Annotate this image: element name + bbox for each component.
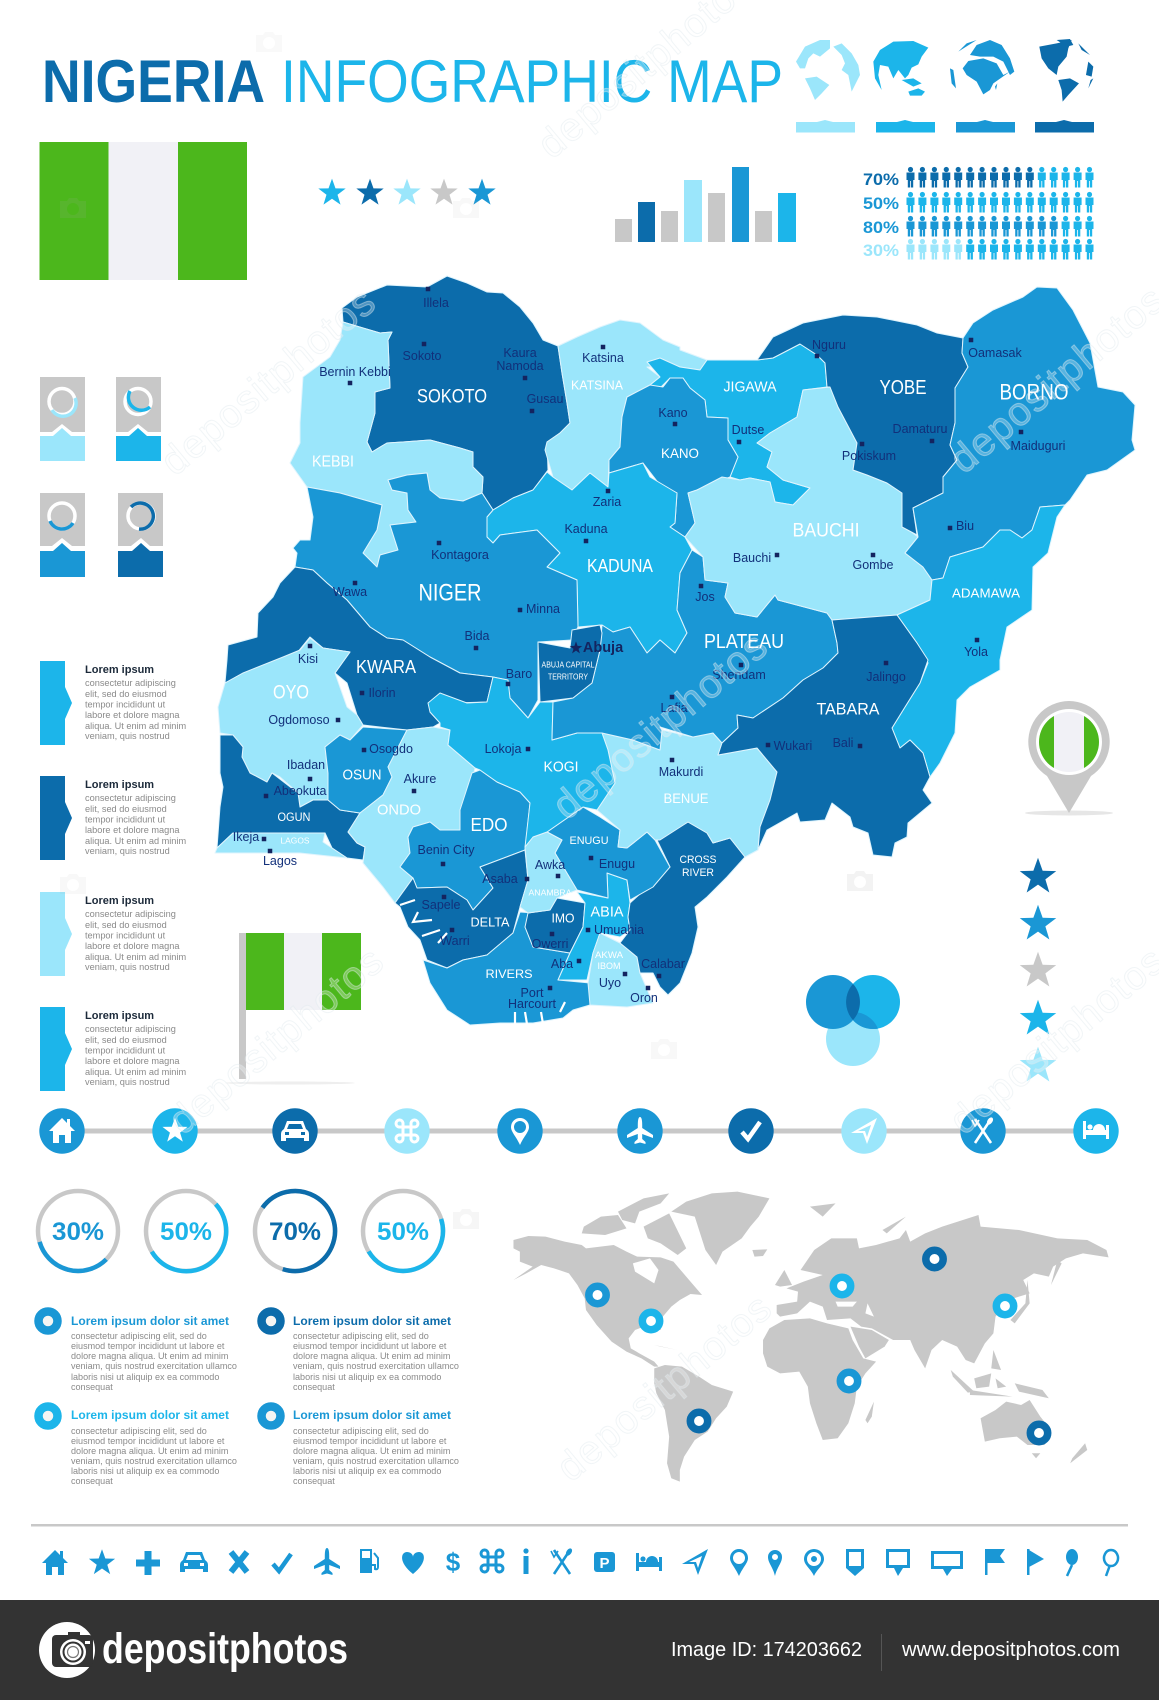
city labels: Lagos xyxy=(263,854,297,868)
city labels: Kisi xyxy=(298,652,318,666)
state names: KOGI xyxy=(544,758,578,776)
city labels: Lokoja xyxy=(485,742,521,756)
state: Taraba xyxy=(718,615,932,857)
state names: ABUJA CAPITAL xyxy=(542,660,595,670)
bar chart xyxy=(615,167,796,242)
state names: KEBBI xyxy=(312,454,354,470)
globe: light xyxy=(796,40,860,100)
info item 1: veniam, quis nostrud xyxy=(85,731,170,741)
info item 3: veniam, quis nostrud xyxy=(85,962,170,972)
city labels: Jalingo xyxy=(866,670,906,684)
state names: NIGER xyxy=(418,580,482,606)
pole shadow xyxy=(225,1082,355,1084)
donut 50% xyxy=(146,1191,226,1271)
city labels: Uyo xyxy=(599,976,621,990)
text block 1 xyxy=(38,1312,237,1392)
city labels: Ogdomoso xyxy=(268,713,330,727)
watermarks: depositphotos xyxy=(152,280,384,484)
info item 4: tempor incididunt ut xyxy=(85,1046,166,1056)
city labels: Port xyxy=(521,986,544,1000)
capital: Abuja: Abuja xyxy=(583,640,624,656)
info item 4: labore et dolore magna xyxy=(85,1056,180,1066)
state: Kano xyxy=(609,378,738,537)
info item 3: labore et dolore magna xyxy=(85,941,180,951)
globe legend bars xyxy=(796,120,1094,132)
info item 4: aliqua. Ut enim ad minim xyxy=(85,1067,186,1077)
city labels: Gusau xyxy=(527,392,563,406)
city labels: Katsina xyxy=(582,351,624,365)
info item 2 xyxy=(40,776,186,860)
donut 50% second: 50% xyxy=(377,1218,429,1246)
state: Bauchi xyxy=(685,387,932,620)
state: Kaduna xyxy=(487,463,692,653)
info item 2: aliqua. Ut enim ad minim xyxy=(85,836,186,846)
map pin with flag xyxy=(1025,701,1113,816)
ring widgets xyxy=(40,377,163,577)
state: Abuja Capital Territory xyxy=(538,625,602,702)
bottom icon strip: $ xyxy=(446,1547,461,1577)
footer logo: depositphotos xyxy=(102,1625,348,1673)
state names: TABARA xyxy=(816,700,880,718)
info item 4: Lorem ipsum xyxy=(85,1010,154,1022)
city labels: Zaria xyxy=(593,495,621,509)
state: Cross River xyxy=(620,822,745,995)
city labels: Aba xyxy=(551,957,573,971)
icon: pin xyxy=(497,1108,543,1154)
state: Osun xyxy=(325,727,407,813)
text block 4: eiusmod tempor incididunt ut labore et xyxy=(293,1436,447,1446)
info item 4 xyxy=(40,1007,186,1091)
city labels: Namoda xyxy=(496,359,544,373)
city labels: Oamasak xyxy=(968,346,1022,360)
location markers xyxy=(589,1250,1048,1442)
title xyxy=(42,48,783,115)
text block 2: consectetur adipiscing elit, sed do xyxy=(293,1331,429,1341)
text block 1: eiusmod tempor incididunt ut labore et xyxy=(71,1341,225,1351)
info item 2: labore et dolore magna xyxy=(85,825,180,835)
state names: AKWA xyxy=(595,950,623,960)
widget 2 xyxy=(116,377,161,461)
info item 3: aliqua. Ut enim ad minim xyxy=(85,952,186,962)
people percentage chart: 30% xyxy=(863,241,899,260)
text block 4: veniam, quis nostrud exercitation ullamco xyxy=(293,1456,459,1466)
world map xyxy=(513,1192,1109,1482)
state names: TERRITORY xyxy=(548,672,589,682)
city labels: Minna xyxy=(526,602,560,616)
state: Plateau xyxy=(552,550,838,750)
state names: IMO xyxy=(552,910,574,926)
footer logo xyxy=(39,1622,348,1678)
watermarks: depositphotos xyxy=(160,939,392,1143)
info item 3: consectetur adipiscing xyxy=(85,909,176,919)
state: Lagos xyxy=(215,833,347,858)
city labels: Wukari xyxy=(774,739,812,753)
bottom icon strip: P xyxy=(599,1555,610,1572)
state: Kebbi xyxy=(290,322,483,567)
title: NIGERIA xyxy=(42,48,265,115)
state names: OSUN xyxy=(342,766,382,784)
state names: LAGOS xyxy=(280,836,310,846)
city labels: Warri xyxy=(440,934,470,948)
city labels: Damaturu xyxy=(893,422,947,436)
city labels: Gombe xyxy=(852,558,894,572)
city labels: Harcourt xyxy=(508,997,556,1011)
donut charts xyxy=(38,1191,443,1271)
donut 70%: 70% xyxy=(269,1218,321,1246)
state: Katsina xyxy=(545,320,707,490)
state names: RIVER xyxy=(682,867,714,879)
text block 3: consectetur adipiscing elit, sed do xyxy=(71,1426,207,1436)
state: Rivers xyxy=(423,912,590,1025)
pole xyxy=(239,933,246,1079)
state names: OGUN xyxy=(278,810,310,824)
state names: ANAMBRA xyxy=(528,888,572,898)
text block 2: eiusmod tempor incididunt ut labore et xyxy=(293,1341,447,1351)
text block 4 xyxy=(262,1406,459,1486)
bottom icon strip xyxy=(42,1547,1118,1577)
city labels: Bali xyxy=(833,736,853,750)
info item 1: labore et dolore magna xyxy=(85,710,180,720)
text block 3: consequat xyxy=(71,1476,113,1486)
state: Yobe xyxy=(757,315,968,535)
globe: medium xyxy=(950,40,1014,94)
info item 2: consectetur adipiscing xyxy=(85,793,176,803)
widget 1 xyxy=(40,377,85,461)
donut 70% xyxy=(255,1191,335,1271)
city labels: Abeokuta xyxy=(274,784,326,798)
state names: BAUCHI xyxy=(792,520,860,542)
info item 2: elit, sed do eiusmod xyxy=(85,804,167,814)
state names: EDO xyxy=(470,815,508,835)
footer bar xyxy=(0,1600,1159,1700)
people percentage chart: 70% xyxy=(863,170,899,189)
state names: CROSS xyxy=(680,854,716,866)
text block 1: Lorem ipsum dolor sit amet xyxy=(71,1314,229,1328)
stars column xyxy=(1020,858,1056,1082)
city labels: Nguru xyxy=(812,338,846,352)
delta creeks xyxy=(400,900,590,1024)
Nigeria flag xyxy=(40,142,247,280)
text block 4: dolore magna aliqua. Ut enim ad minim xyxy=(293,1446,450,1456)
city labels: Sapele xyxy=(422,898,461,912)
info item 4: veniam, quis nostrud xyxy=(85,1077,170,1087)
state: Anambra xyxy=(520,832,577,913)
info item 1: aliqua. Ut enim ad minim xyxy=(85,721,186,731)
website: www.depositphotos.com xyxy=(901,1639,1120,1661)
city markers xyxy=(264,289,1021,988)
info item 1 xyxy=(40,661,186,745)
city labels: Ibadan xyxy=(287,758,325,772)
icon: star xyxy=(152,1108,198,1154)
text block 4: Lorem ipsum dolor sit amet xyxy=(293,1408,451,1422)
text block 2: dolore magna aliqua. Ut enim ad minim xyxy=(293,1351,450,1361)
state: Imo xyxy=(525,898,585,953)
text block 3: veniam, quis nostrud exercitation ullamco xyxy=(71,1456,237,1466)
icon: car xyxy=(272,1108,318,1154)
info item 3: tempor incididunt ut xyxy=(85,930,166,940)
state: Adamawa xyxy=(892,505,1065,777)
state: Ondo xyxy=(348,727,475,903)
venn diagram xyxy=(806,975,900,1066)
state: Jigawa xyxy=(647,344,827,505)
donut 50%: 50% xyxy=(160,1218,212,1246)
city labels: Lafia xyxy=(660,701,688,715)
state: Kwara xyxy=(225,567,493,730)
text block 3: laboris nisi ut aliquip ex ea commodo xyxy=(71,1466,219,1476)
state names: DELTA xyxy=(470,914,510,930)
icon: navigation xyxy=(841,1108,887,1154)
city labels: Benin City xyxy=(418,843,475,857)
info item 2: Lorem ipsum xyxy=(85,779,154,791)
info item 1: tempor incididunt ut xyxy=(85,700,166,710)
city labels: Baro xyxy=(506,667,532,681)
state names: OYO xyxy=(273,682,309,704)
text block 3 xyxy=(38,1406,237,1486)
state names: ONDO xyxy=(377,802,421,818)
text block 1: dolore magna aliqua. Ut enim ad minim xyxy=(71,1351,228,1361)
icon: command xyxy=(384,1108,430,1154)
state names: ADAMAWA xyxy=(952,586,1020,600)
info item 3: Lorem ipsum xyxy=(85,895,154,907)
watermarks: depositphotos xyxy=(544,624,776,828)
state: Edo xyxy=(400,770,530,910)
city labels: Osogdo xyxy=(369,742,413,756)
city labels: Oron xyxy=(630,991,658,1005)
state names: ABIA xyxy=(590,904,624,920)
icon: home xyxy=(39,1108,85,1154)
city labels: Awka xyxy=(535,858,565,872)
state names: SOKOTO xyxy=(417,386,487,408)
state: Abia xyxy=(558,873,630,980)
city labels: Pokiskum xyxy=(842,449,896,463)
city labels: Kano xyxy=(658,406,688,420)
state names: PLATEAU xyxy=(704,631,784,653)
info item 4: elit, sed do eiusmod xyxy=(85,1035,167,1045)
state names: KATSINA xyxy=(571,378,623,392)
city labels: Sokoto xyxy=(403,349,442,363)
state names: ENUGU xyxy=(570,835,609,847)
donut 30%: 30% xyxy=(52,1218,104,1246)
city labels: Bernin Kebbi xyxy=(319,365,391,379)
info list xyxy=(40,661,186,1091)
continents xyxy=(513,1192,1109,1482)
city labels: Yola xyxy=(964,645,988,659)
map of Nigeria xyxy=(215,276,1135,1025)
city labels: Shendam xyxy=(712,668,766,682)
city labels: Kaduna xyxy=(564,522,608,536)
icon timeline xyxy=(39,1108,1119,1154)
city labels: Bida xyxy=(464,629,490,643)
globes row xyxy=(796,39,1093,102)
text blocks xyxy=(38,1312,459,1486)
city labels: Umuahia xyxy=(594,923,644,937)
info item 2: veniam, quis nostrud xyxy=(85,846,170,856)
state: Benue xyxy=(597,730,777,857)
text block 1: veniam, quis nostrud exercitation ullamco xyxy=(71,1361,237,1371)
text block 2: laboris nisi ut aliquip ex ea commodo xyxy=(293,1372,441,1382)
state: Enugu xyxy=(547,807,670,900)
text block 2 xyxy=(262,1312,459,1392)
info item 3: elit, sed do eiusmod xyxy=(85,920,167,930)
info item 2: tempor incididunt ut xyxy=(85,814,166,824)
city labels: Ikeja xyxy=(233,830,259,844)
icon: cutlery xyxy=(960,1108,1006,1154)
city labels: Akure xyxy=(404,772,436,786)
text block 1: consectetur adipiscing elit, sed do xyxy=(71,1331,207,1341)
city labels: Makurdi xyxy=(659,765,703,779)
state: Oyo xyxy=(218,638,363,807)
city labels: Kontagora xyxy=(431,548,489,562)
widget 4 xyxy=(118,493,163,577)
city labels: Wawa xyxy=(333,585,367,599)
title: INFOGRAPHIC MAP xyxy=(281,48,783,115)
text block 3: eiusmod tempor incididunt ut labore et xyxy=(71,1436,225,1446)
text block 4: laboris nisi ut aliquip ex ea commodo xyxy=(293,1466,441,1476)
city labels: Ilorin xyxy=(368,686,396,700)
state names: KANO xyxy=(661,445,699,461)
people percentage chart xyxy=(863,167,1094,260)
city labels: Illela xyxy=(423,296,449,310)
icon: check xyxy=(728,1108,774,1154)
info item 4: consectetur adipiscing xyxy=(85,1024,176,1034)
people percentage chart: 80% xyxy=(863,218,899,237)
text block 1: laboris nisi ut aliquip ex ea commodo xyxy=(71,1372,219,1382)
text block 3: Lorem ipsum dolor sit amet xyxy=(71,1408,229,1422)
text block 1: consequat xyxy=(71,1382,113,1392)
text block 4: consectetur adipiscing elit, sed do xyxy=(293,1426,429,1436)
city labels: Owerri xyxy=(532,937,568,951)
state names: BENUE xyxy=(664,790,708,806)
city labels: Dutse xyxy=(732,423,764,437)
text block 4: consequat xyxy=(293,1476,335,1486)
state names: KADUNA xyxy=(587,556,653,576)
state: Borno xyxy=(905,287,1135,580)
state: Sokoto xyxy=(342,276,570,510)
city labels: Biu xyxy=(956,519,974,533)
icon: plane xyxy=(617,1108,663,1154)
city labels xyxy=(233,296,1065,1011)
info item 3 xyxy=(40,892,186,976)
info item 1: elit, sed do eiusmod xyxy=(85,689,167,699)
globe: cyan xyxy=(873,41,928,96)
city labels: Calabar xyxy=(641,957,685,971)
divider xyxy=(31,1524,1128,1526)
text block 2: veniam, quis nostrud exercitation ullamco xyxy=(293,1361,459,1371)
globe: dark xyxy=(1039,39,1093,102)
star rating row xyxy=(318,179,496,205)
icon: bed xyxy=(1073,1108,1119,1154)
state: Ogun xyxy=(217,735,365,860)
city labels: Asaba xyxy=(482,872,518,886)
flag xyxy=(246,933,361,1010)
state: Delta xyxy=(395,850,528,968)
city labels: Jos xyxy=(695,590,715,604)
text block 2: consequat xyxy=(293,1382,335,1392)
people percentage chart: 50% xyxy=(863,194,899,213)
city labels: Maiduguri xyxy=(1011,439,1065,453)
donut 30% xyxy=(38,1191,118,1271)
watermarks: depositphotos xyxy=(548,1286,780,1490)
city labels: Bauchi xyxy=(733,551,771,565)
text block 3: dolore magna aliqua. Ut enim ad minim xyxy=(71,1446,228,1456)
state: Akwa Ibom xyxy=(588,933,653,1007)
state names: BORNO xyxy=(1000,380,1068,404)
state: Niger xyxy=(293,473,578,718)
city labels: Enugu xyxy=(599,857,635,871)
state names xyxy=(273,377,1068,981)
state names: KWARA xyxy=(356,657,416,677)
info item 1: Lorem ipsum xyxy=(85,664,154,676)
donut 50% second xyxy=(363,1191,443,1271)
state names: YOBE xyxy=(880,377,926,399)
text block 2: Lorem ipsum dolor sit amet xyxy=(293,1314,451,1328)
state names: IBOM xyxy=(598,961,620,971)
info item 1: consectetur adipiscing xyxy=(85,678,176,688)
state: Kogi xyxy=(428,677,615,847)
city labels: Kaura xyxy=(503,346,537,360)
widget 3 xyxy=(40,493,85,577)
image id: Image ID: 174203662 xyxy=(671,1639,862,1661)
state names: RIVERS xyxy=(486,967,532,981)
state names: JIGAWA xyxy=(724,378,776,396)
flag on pole xyxy=(225,933,361,1084)
